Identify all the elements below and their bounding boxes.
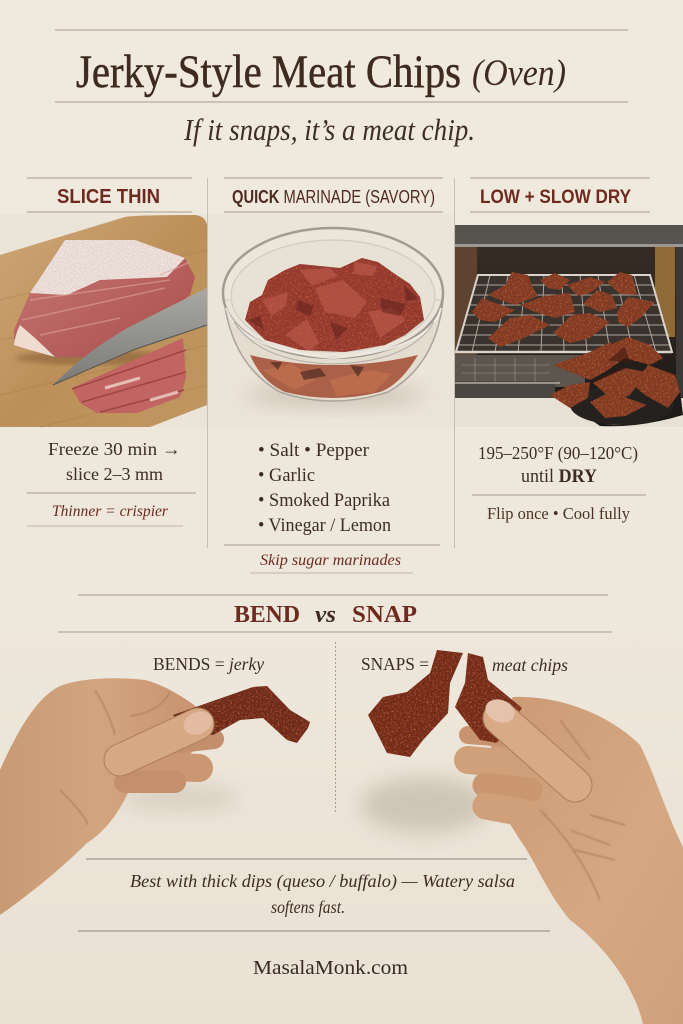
column dividers xyxy=(208,178,454,548)
heading: quick marinade: QUICK MARINADE (SAVORY) xyxy=(232,187,435,207)
photo: right hand snapping meat chip xyxy=(360,650,683,1024)
heading: bend vs snap: BEND xyxy=(234,602,300,628)
text: freeze instruction xyxy=(48,439,181,484)
heading: bend vs snap xyxy=(58,595,612,632)
footer: website: MasalaMonk.com xyxy=(253,957,408,979)
text: dip tip xyxy=(78,859,550,931)
heading: slice thin: SLICE THIN xyxy=(57,186,160,208)
subtitle: If it snaps, it’s a meat chip. xyxy=(183,112,475,147)
label: bends = jerky: BENDS = jerky xyxy=(153,654,264,674)
photo: meat on cutting board xyxy=(0,214,207,427)
note: flip once, cool fully: Flip once • Cool fully xyxy=(487,504,631,523)
rack chips xyxy=(472,272,655,347)
panel: bends = jerky xyxy=(0,654,310,915)
heading: bend vs snap: vs xyxy=(315,602,336,628)
text: ingredient list: • Smoked Paprika xyxy=(258,491,390,511)
heading: bend vs snap: SNAP xyxy=(352,602,417,628)
panel: snaps = meat chips xyxy=(360,650,683,1024)
label: snaps = meat chips: SNAPS = xyxy=(361,654,429,674)
text: freeze instruction: slice 2–3 mm xyxy=(66,464,163,484)
text: dip tip: Best with thick dips (queso / buffalo) — Watery salsa xyxy=(130,871,515,892)
photo: left hand bending jerky xyxy=(0,678,310,915)
note: thinner = crispier: Thinner = crispier xyxy=(52,503,169,520)
text: freeze instruction: Freeze 30 min → xyxy=(48,439,181,459)
panel: slice thin xyxy=(0,178,207,526)
text: ingredient list: • Vinegar / Lemon xyxy=(258,516,391,536)
panel: low + slow dry xyxy=(455,178,683,523)
text: dip tip: softens fast. xyxy=(271,897,345,917)
text: ingredient list: • Salt • Pepper xyxy=(258,441,369,461)
note: skip sugar marinades: Skip sugar marinades xyxy=(260,552,401,569)
text: temperature instruction xyxy=(478,443,638,487)
text: ingredient list: • Garlic xyxy=(258,466,315,486)
title xyxy=(55,30,628,102)
label: snaps = meat chips: meat chips xyxy=(492,655,568,675)
text: ingredient list xyxy=(258,441,391,536)
label: snaps = meat chips xyxy=(361,654,568,675)
heading: low + slow dry: LOW + SLOW DRY xyxy=(480,187,631,208)
photo: glass bowl of marinating beef xyxy=(208,214,454,427)
title: (Oven) xyxy=(472,53,566,94)
text: temperature instruction: until DRY xyxy=(521,467,598,487)
photo: oven with rack of meat chips xyxy=(455,225,683,427)
panel: quick marinade xyxy=(208,178,454,573)
text: temperature instruction: 195–250°F (90–120°C) xyxy=(478,443,638,463)
plate with chips xyxy=(550,337,683,426)
title: Jerky-Style Meat Chips xyxy=(76,46,461,98)
